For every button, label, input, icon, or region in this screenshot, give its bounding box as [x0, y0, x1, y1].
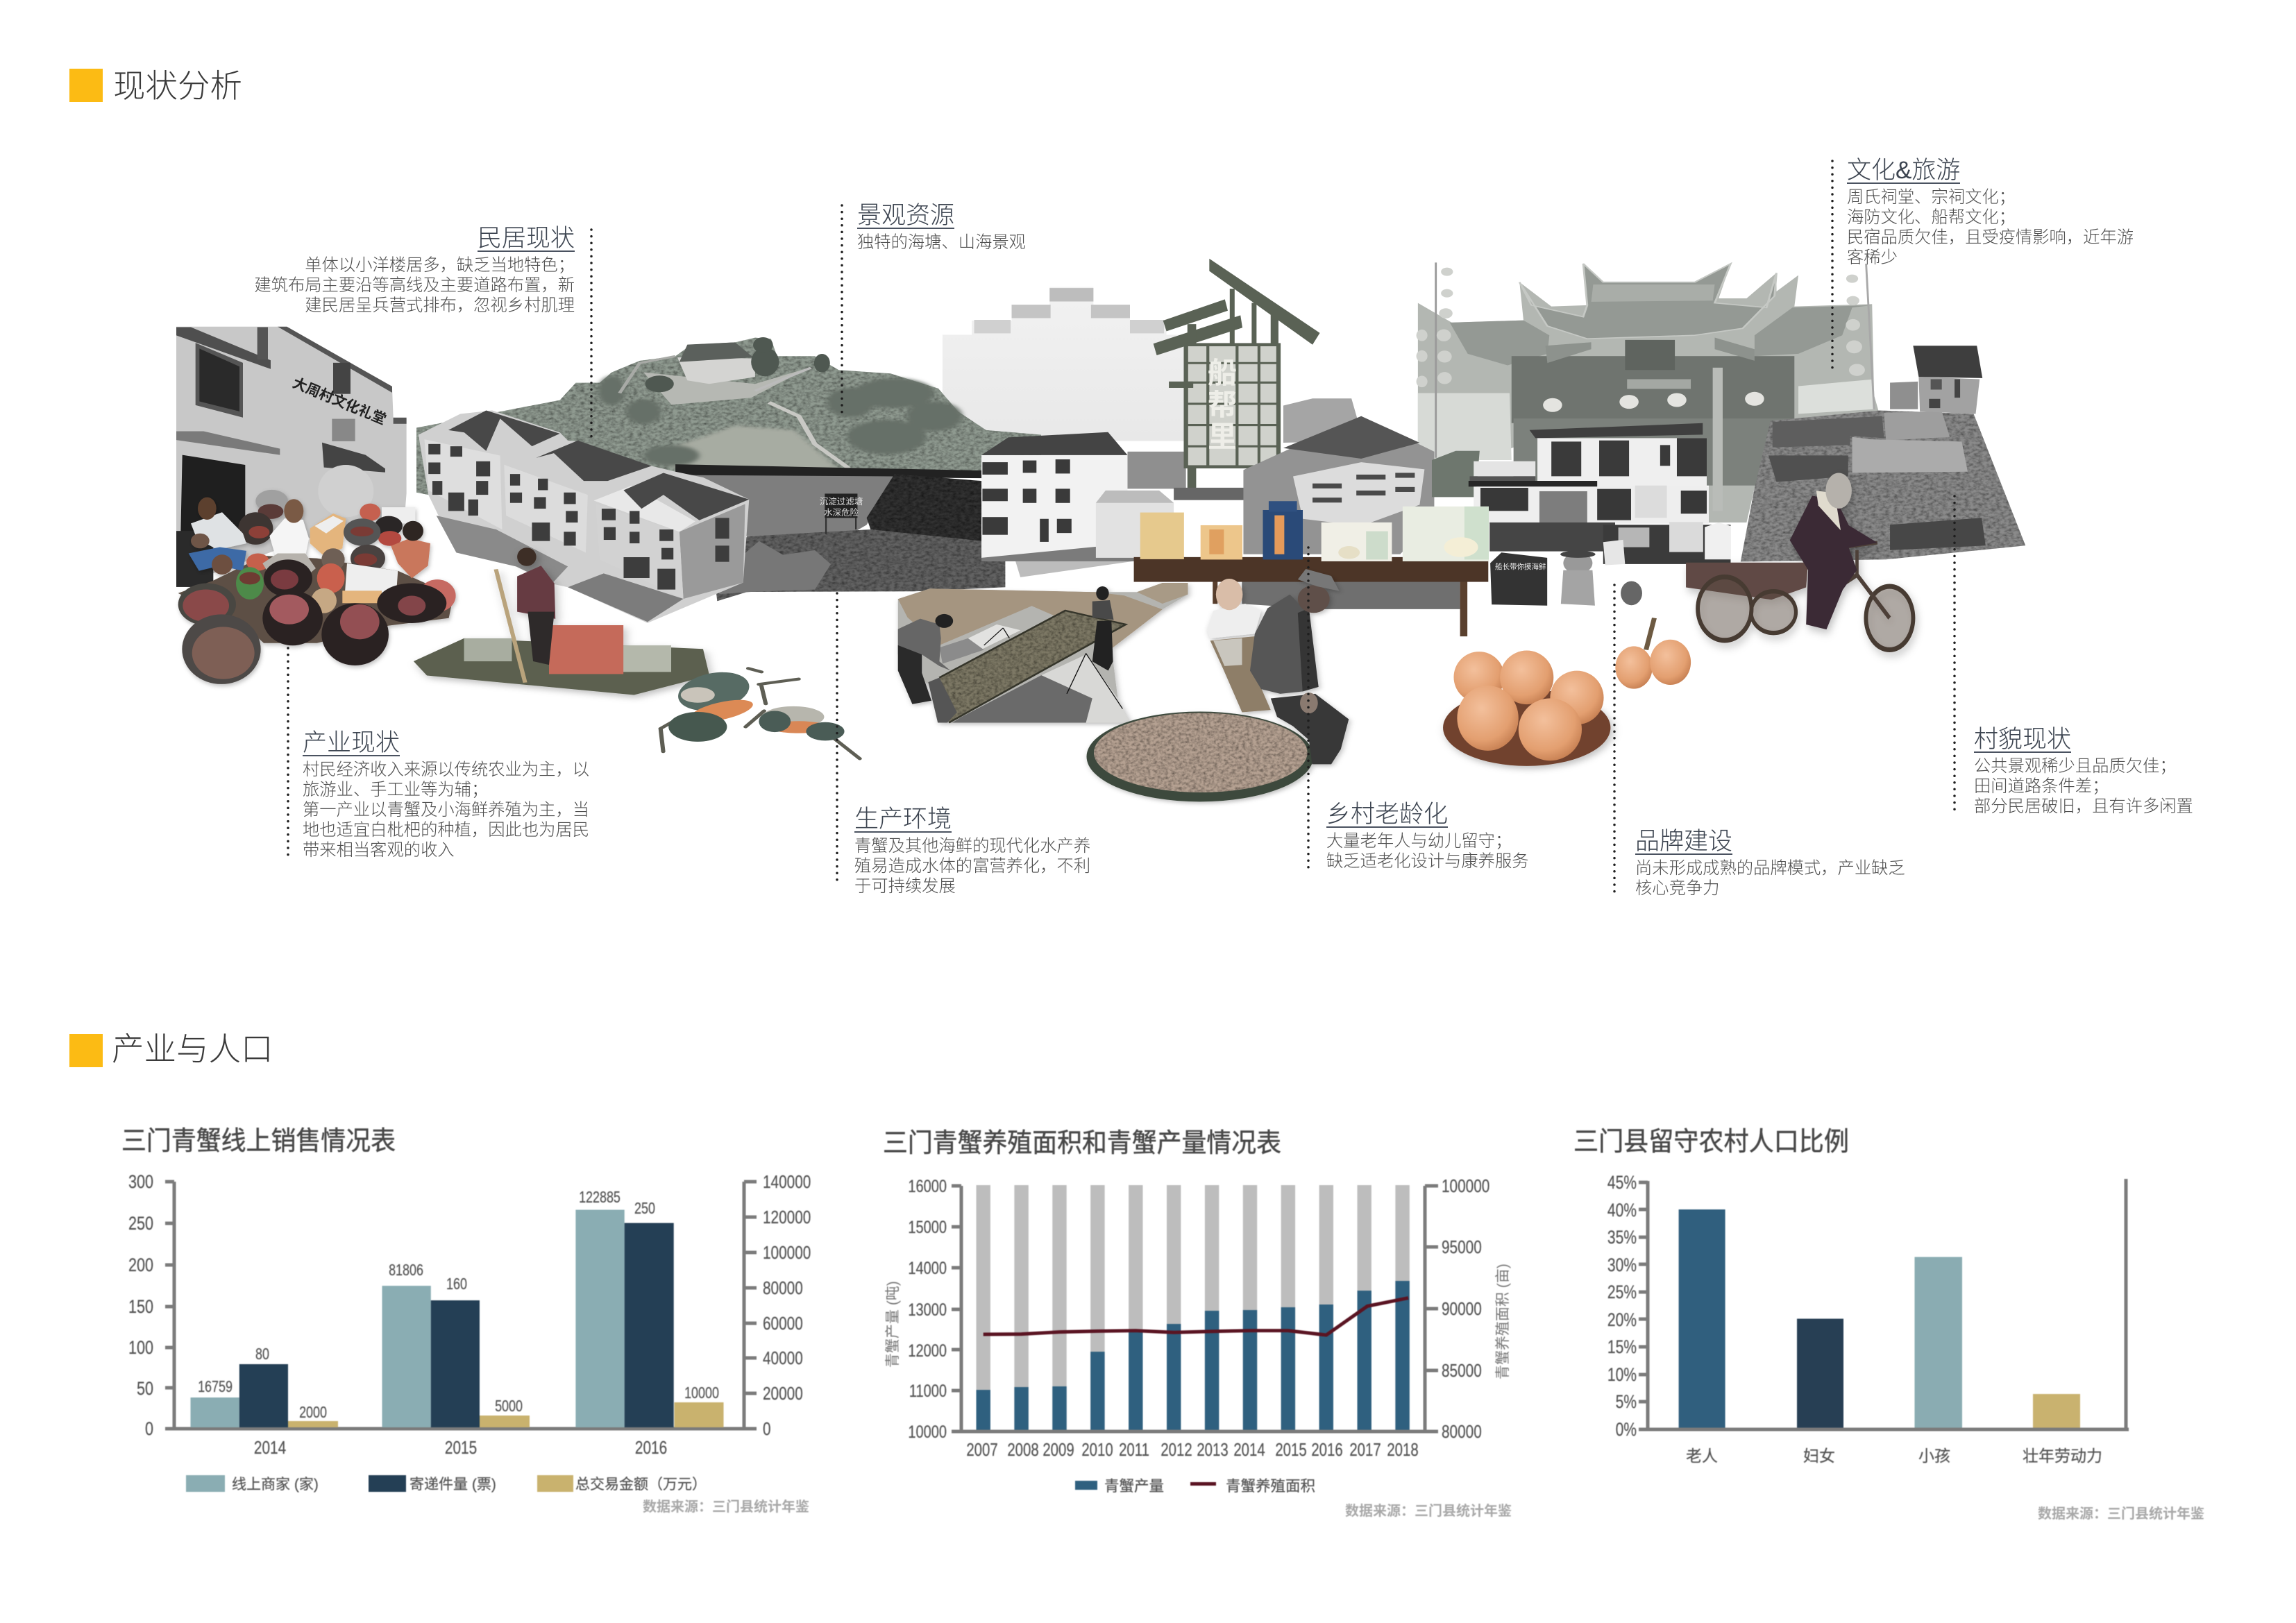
year labels	[254, 1438, 667, 1458]
text block: 民居现状: 建筑布局主要沿等高线及主要道路布置，新	[254, 276, 575, 295]
boatman and crab boat	[414, 547, 709, 695]
legend	[1075, 1478, 1315, 1495]
right axis labels	[763, 1172, 811, 1439]
right axis labels: 120000	[763, 1207, 811, 1227]
year labels: 2015	[445, 1438, 477, 1458]
left axis labels	[128, 1172, 153, 1440]
area line	[984, 1298, 1408, 1335]
chart: 三门青蟹线上销售情况表	[121, 1127, 811, 1515]
gate sign: 船帮里: 船	[1208, 357, 1237, 389]
right axis labels: 90000	[1442, 1299, 1482, 1319]
text block: 生产环境: 生产环境	[854, 806, 952, 833]
text block: 村貌现状: 公共景观稀少且品质欠佳；	[1974, 757, 2177, 776]
text block: 产业现状: 旅游业、手工业等为辅；	[303, 781, 488, 799]
display stall	[1603, 522, 1730, 566]
value labels: 81806	[389, 1261, 423, 1280]
value labels: 122885	[579, 1189, 621, 1207]
bars	[1679, 1209, 2080, 1429]
text block: 村貌现状: 田间道路条件差；	[1974, 777, 2109, 796]
right axis labels: 80000	[763, 1278, 803, 1298]
heading: 产业与人口: 产业与人口	[112, 1031, 273, 1067]
legend	[186, 1475, 707, 1493]
year labels: 2013	[1197, 1440, 1229, 1460]
left axis labels: 0	[145, 1419, 153, 1440]
text block: 品牌建设	[1635, 828, 1905, 898]
value labels: 160	[446, 1275, 467, 1293]
modern white guesthouse	[1432, 423, 1709, 552]
heading: 现状分析: 现状分析	[113, 68, 242, 104]
text block: 村貌现状: 部分民居破旧，且有许多闲置	[1974, 797, 2193, 816]
left axis title: 青蟹产量 (吨)	[885, 1281, 901, 1368]
right axis labels: 85000	[1442, 1361, 1482, 1381]
right axis labels	[1442, 1176, 1489, 1442]
left axis labels: 13000	[908, 1300, 947, 1320]
right axis labels: 0	[763, 1419, 771, 1439]
text block: 乡村老龄化: 乡村老龄化	[1326, 801, 1448, 828]
left axis labels: 12000	[908, 1341, 947, 1361]
text block: 乡村老龄化	[1326, 801, 1529, 871]
crab output bars	[976, 1281, 1410, 1431]
year labels: 2008	[1007, 1440, 1039, 1460]
year labels: 2018	[1387, 1440, 1419, 1460]
text block: 生产环境: 于可持续发展	[854, 877, 956, 896]
chart title: 三门青蟹线上销售情况表	[121, 1127, 396, 1156]
text block: 产业现状: 产业现状	[303, 729, 400, 756]
right axis labels: 40000	[763, 1348, 803, 1368]
value labels: 16759	[198, 1378, 233, 1396]
villagers sorting crabs	[178, 490, 456, 684]
year labels: 2015	[1275, 1440, 1307, 1460]
axis labels: 20%	[1607, 1310, 1637, 1331]
left axis labels: 50	[137, 1379, 153, 1400]
section marker: 产业与人口	[69, 1034, 103, 1067]
legend: 寄递件量 (票)	[410, 1477, 496, 1493]
crab baskets and bags	[264, 559, 312, 597]
category labels: 妇女	[1803, 1447, 1835, 1465]
text block: 乡村老龄化: 缺乏适老化设计与康养服务	[1326, 852, 1529, 871]
axis labels: 45%	[1607, 1173, 1637, 1193]
value labels: 10000	[684, 1384, 719, 1402]
chart title: 三门县留守农村人口比例	[1573, 1128, 1849, 1157]
right axis labels: 140000	[763, 1172, 811, 1192]
photo collage	[176, 160, 2025, 892]
old woman on tricycle	[1686, 473, 1913, 649]
elderly man with baby in basket	[1207, 569, 1349, 764]
gate sign: 船帮里: 帮	[1208, 389, 1237, 421]
axes	[952, 1186, 1438, 1431]
table with product boxes	[1134, 501, 1489, 636]
farm yard with small house	[1741, 346, 2025, 562]
year labels: 2017	[1349, 1440, 1381, 1460]
left axis labels: 14000	[908, 1259, 947, 1278]
chart: 三门县留守农村人口比例	[1573, 1127, 2204, 1522]
right axis labels: 60000	[763, 1314, 803, 1334]
pond sign text: 沉淀过滤塘	[820, 496, 863, 507]
text block: 民居现状	[254, 225, 575, 315]
pond sign text	[820, 496, 863, 518]
category labels: 老人	[1686, 1447, 1718, 1465]
right axis labels: 100000	[763, 1243, 811, 1263]
year labels: 2007	[966, 1440, 998, 1460]
left axis labels: 10000	[908, 1422, 947, 1442]
buckets and boxes	[236, 567, 264, 600]
axes	[1639, 1179, 2129, 1429]
mascot sign text: 船长带你摸海鲜	[1495, 562, 1546, 571]
left axis labels: 16000	[908, 1177, 947, 1196]
pale ghost village sky	[943, 287, 1186, 441]
value labels: 2000	[299, 1404, 327, 1422]
text block: 文化&旅游: 客稀少	[1847, 248, 1898, 267]
left axis labels: 300	[128, 1172, 153, 1193]
text block: 产业现状: 第一产业以青蟹及小海鲜养殖为主，当	[303, 801, 589, 819]
text block: 品牌建设: 品牌建设	[1635, 828, 1732, 855]
text block: 乡村老龄化: 大量老年人与幼儿留守；	[1326, 832, 1512, 851]
year labels: 2014	[1233, 1440, 1265, 1460]
text block: 景观资源: 独特的海塘、山海景观	[857, 233, 1026, 252]
text block: 民居现状: 单体以小洋楼居多，缺乏当地特色；	[305, 256, 575, 275]
text block: 文化&旅游	[1847, 157, 2134, 267]
left axis labels: 100	[128, 1338, 153, 1359]
axis labels: 5%	[1616, 1392, 1637, 1413]
text block: 文化&旅游: 海防文化、船帮文化；	[1847, 208, 2016, 227]
person plaid	[191, 512, 246, 550]
text block: 品牌建设: 尚未形成成熟的品牌模式，产业缺乏	[1635, 859, 1905, 878]
crab mascot sign	[1490, 551, 1642, 606]
text block: 村貌现状	[1974, 726, 2193, 816]
left axis labels: 250	[128, 1214, 153, 1234]
legend: 青蟹养殖面积	[1226, 1478, 1315, 1495]
category labels: 壮年劳动力	[2023, 1447, 2102, 1465]
left axis labels	[908, 1177, 947, 1442]
row of three villas	[419, 411, 749, 623]
white house and village buildings	[981, 398, 1364, 577]
axis labels	[1607, 1173, 1637, 1441]
hall sign: 大周村文化礼堂	[290, 374, 389, 428]
value labels	[198, 1189, 719, 1422]
right axis labels: 100000	[1442, 1176, 1489, 1196]
loquat pair	[1615, 618, 1691, 689]
text block: 文化&旅游: 文化&旅游	[1847, 157, 1960, 184]
right axis title: 青蟹养殖面积 (亩)	[1495, 1264, 1511, 1379]
value labels: 5000	[495, 1397, 523, 1416]
text block: 文化&旅游: 周氏祠堂、宗祠文化；	[1847, 188, 2016, 207]
cultural hall building	[176, 327, 407, 587]
legend: 线上商家 (家)	[232, 1477, 319, 1493]
person orange	[391, 538, 430, 578]
legend: 青蟹产量	[1104, 1478, 1164, 1495]
category labels	[1686, 1447, 2102, 1465]
value labels: 250	[634, 1200, 655, 1218]
chart title: 三门青蟹养殖面积和青蟹产量情况表	[883, 1129, 1281, 1158]
left axis labels: 11000	[909, 1382, 947, 1401]
text block: 产业现状: 地也适宜白枇杷的种植，因此也为居民	[303, 821, 589, 840]
dotted leader lines	[288, 161, 1955, 894]
year labels: 2016	[1311, 1440, 1343, 1460]
text block: 产业现状	[303, 729, 589, 860]
source note: 数据来源：三门县统计年鉴	[643, 1498, 809, 1515]
text block: 产业现状: 村民经济收入来源以传统农业为主，以	[303, 760, 589, 779]
text block: 文化&旅游: 民宿品质欠佳，且受疫情影响，近年游	[1847, 228, 2134, 247]
text block: 景观资源: 景观资源	[857, 202, 954, 229]
axis labels: 25%	[1607, 1282, 1637, 1303]
axis labels: 40%	[1607, 1200, 1637, 1221]
crabs	[661, 665, 860, 758]
year labels	[966, 1440, 1419, 1460]
grey bars background	[976, 1185, 1410, 1431]
year labels: 2009	[1043, 1440, 1074, 1460]
source note: 数据来源：三门县统计年鉴	[1345, 1502, 1512, 1519]
text block: 民居现状: 建民居呈兵营式排布，忽视乡村肌理	[305, 296, 575, 315]
year labels: 2010	[1081, 1440, 1113, 1460]
central apartment block	[1243, 416, 1434, 554]
right axis labels: 95000	[1442, 1237, 1482, 1257]
axis labels: 15%	[1607, 1337, 1637, 1358]
bars 2015	[382, 1286, 530, 1427]
axis labels: 0%	[1616, 1420, 1637, 1441]
gate sign: 船帮里: 里	[1208, 420, 1237, 453]
section marker: 现状分析	[69, 69, 103, 102]
axis labels: 35%	[1607, 1227, 1637, 1248]
pond sign text: 水深危险	[824, 507, 859, 518]
year labels: 2014	[254, 1438, 286, 1458]
person white	[269, 518, 309, 556]
landscape: hill, hilltop temple, pond and rocks	[416, 337, 1041, 601]
text block: 民居现状: 民居现状	[478, 225, 575, 252]
text block: 村貌现状: 村貌现状	[1974, 726, 2071, 753]
bars 2014	[190, 1364, 338, 1427]
wooden village gate	[1154, 259, 1320, 500]
year labels: 2016	[635, 1438, 667, 1458]
right axis labels: 20000	[763, 1384, 803, 1404]
text block: 品牌建设: 核心竞争力	[1635, 879, 1719, 898]
year labels: 2011	[1119, 1440, 1149, 1460]
right axis labels: 80000	[1442, 1422, 1482, 1442]
text block: 生产环境	[854, 806, 1090, 896]
text block: 产业现状: 带来相当客观的收入	[303, 841, 455, 860]
bars 2016	[575, 1210, 723, 1427]
text block: 生产环境: 青蟹及其他海鲜的现代化水产养	[854, 837, 1090, 856]
left axis labels: 200	[128, 1255, 153, 1276]
axis labels: 10%	[1607, 1365, 1637, 1386]
year labels: 2012	[1160, 1440, 1192, 1460]
drying racks with workers	[898, 583, 1188, 722]
shrimp drying tray	[1086, 711, 1313, 801]
legend: 总交易金额（万元）	[575, 1477, 707, 1493]
chart: 三门青蟹养殖面积和青蟹产量情况表	[883, 1128, 1512, 1519]
text block: 景观资源	[857, 202, 1026, 252]
axis labels: 30%	[1607, 1255, 1637, 1276]
value labels: 80	[255, 1345, 269, 1363]
text block: 生产环境: 殖易造成水体的富营养化，不利	[854, 857, 1090, 876]
axes	[165, 1182, 757, 1429]
category labels: 小孩	[1918, 1447, 1950, 1465]
left axis labels: 150	[128, 1297, 153, 1318]
big temple	[1417, 262, 1880, 522]
source note: 数据来源：三门县统计年鉴	[2038, 1505, 2204, 1522]
left axis labels: 15000	[908, 1218, 947, 1237]
loquats in wooden bowl	[1443, 651, 1610, 766]
